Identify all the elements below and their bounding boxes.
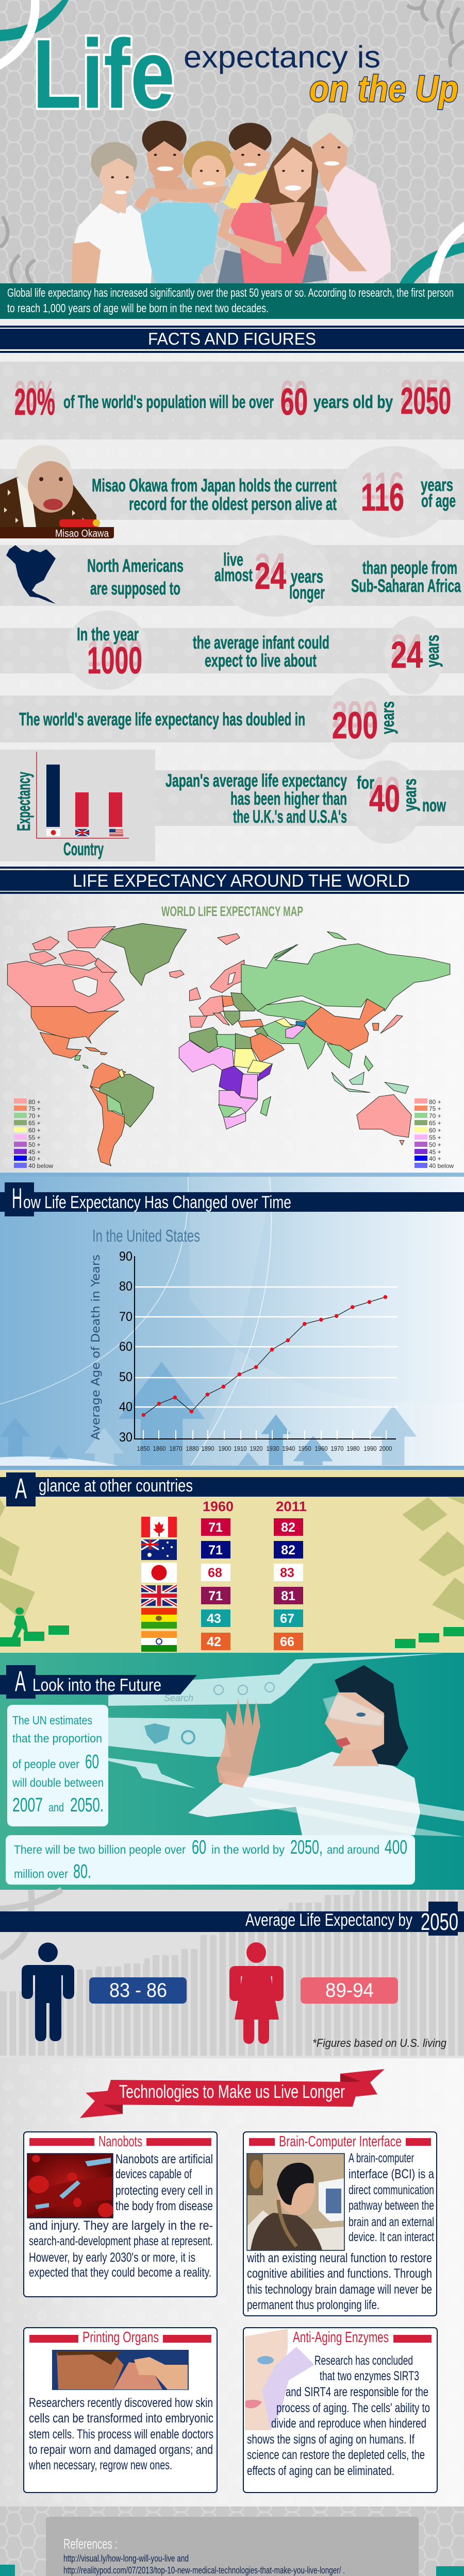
decorative ring — [0, 1890, 62, 1958]
section heading: facts and figures: FACTS AND FIGURES — [148, 329, 316, 348]
line chart: average age of death: 1910 — [234, 1445, 246, 1452]
line chart: average age of death: 50 — [119, 1370, 132, 1384]
legend right: 40 + — [429, 1155, 441, 1162]
callout: UN estimates: and — [48, 1801, 64, 1814]
card text: cells can be transformed into embryonic — [29, 2411, 213, 2426]
fact: year 1000: 1000 — [87, 640, 142, 682]
card: Brain-Computer Interface — [243, 2132, 437, 2316]
line chart: average age of death: 1940 — [283, 1445, 295, 1452]
name label: Misao Okawa — [55, 528, 109, 539]
line chart: average age of death: 60 — [119, 1340, 132, 1354]
panel: how life expectancy has changed — [0, 1170, 464, 1470]
fact: North Americans: are supposed to — [90, 579, 180, 599]
fact: 20 percent: of The world's population will be over — [63, 392, 274, 412]
legend right — [415, 1098, 454, 1170]
card: Printing Organs — [24, 2328, 217, 2493]
card text: and injury. They are largely in the re- — [29, 2218, 213, 2233]
line chart: average age of death: 1880 — [186, 1445, 199, 1452]
card text: Researchers recently discovered how skin — [29, 2396, 213, 2410]
line chart: average age of death: 1950 — [298, 1445, 311, 1452]
card text — [29, 2152, 213, 2280]
card: Anti-Aging Enzymes — [243, 2328, 437, 2493]
fact: Misao Okawa: 116 — [361, 464, 404, 507]
fact: North Americans: North Americans — [87, 556, 184, 576]
line chart: average age of death: Average Age of Death in Years — [90, 1255, 103, 1440]
image: person wearing EEG cap — [247, 2154, 344, 2250]
line chart: average age of death: 1860 — [153, 1445, 166, 1452]
interface details — [144, 1683, 274, 1744]
bar chart: expectancy by country: Country — [63, 839, 104, 859]
label: men 83-86 — [89, 1977, 187, 2004]
section heading: how life expectancy changed: H — [12, 1182, 22, 1214]
fact: doubled in 200 years: years — [378, 701, 398, 734]
table column headings: 1960 — [203, 1499, 234, 1514]
grandfather — [307, 113, 391, 284]
fact: Japan 40 years: now — [422, 795, 446, 816]
line chart: average age of death: 1990 — [364, 1445, 376, 1452]
card heading: Anti-Aging Enzymes — [293, 2329, 389, 2346]
card text: the body from disease — [115, 2199, 213, 2213]
table column headings: 2011 — [276, 1499, 307, 1514]
intro text bar: to reach 1,000 years of age will be born in the next two decades. — [7, 301, 269, 315]
callout: UN estimates: of people over — [12, 1757, 79, 1771]
callout: two billion people: There will be two billion people over — [14, 1843, 186, 1856]
fact: Japan 40 years: for — [357, 773, 374, 793]
section heading: around the world: LIFE EXPECTANCY AROUND THE WORLD — [73, 871, 410, 891]
card heading: Printing Organs — [82, 2329, 159, 2346]
line chart: average age of death: 1980 — [346, 1445, 360, 1452]
fact: Japan 40 years: 40 — [369, 770, 400, 811]
line chart: average age of death: 80 — [119, 1279, 132, 1294]
section heading: how life expectancy changed — [0, 1182, 464, 1216]
panel: technologies to make us live longer — [0, 2058, 464, 2506]
row: Canada: 82 — [281, 1520, 295, 1535]
row: Bolivia: 67 — [280, 1612, 294, 1626]
fact: year 1000: In the year — [77, 624, 139, 645]
card text: effects of aging can be eliminated. — [247, 2464, 394, 2478]
label: women 89-94 — [301, 1977, 398, 2004]
legend right: 45 + — [429, 1148, 441, 1156]
grandmother — [72, 142, 153, 284]
legend right: 80 + — [429, 1098, 441, 1106]
callout: two billion people: in the world by — [211, 1843, 285, 1856]
card: Nanobots — [24, 2132, 217, 2297]
line chart: average age of death: 1900 — [219, 1445, 231, 1452]
card heading — [29, 2133, 211, 2150]
row: Canada — [141, 1517, 303, 1537]
row: India: 66 — [280, 1635, 294, 1649]
fact: North Americans: longer — [289, 583, 325, 603]
line chart: average age of death: 40 — [119, 1400, 132, 1414]
legend right: 75 + — [429, 1105, 441, 1112]
card text: shows the signs of aging on humans. If — [247, 2432, 415, 2447]
fact: Misao Okawa — [0, 445, 456, 539]
title — [32, 20, 458, 129]
fact: Misao Okawa: Misao Okawa from Japan holds the current — [92, 476, 337, 496]
callout: UN estimates: will double between — [12, 1776, 104, 1789]
footnote: *Figures based on U.S. living — [312, 2037, 447, 2049]
line chart: average age of death: 1870 — [169, 1445, 183, 1452]
fact: Japan 40 years: has been higher than — [230, 789, 347, 809]
fact: doubled in 200 years: The world's average life expectancy has doubled in — [19, 709, 305, 730]
fact: year 1000: 1000 — [87, 633, 142, 674]
fact: Japan 40 years: 40 — [369, 778, 400, 820]
legend right: 55 + — [429, 1134, 441, 1141]
row: UK — [141, 1585, 303, 1606]
row: Japan: 83 — [280, 1566, 294, 1580]
card text: However, by early 2030's or more, it is — [29, 2250, 195, 2265]
legend left: 45 + — [28, 1148, 41, 1156]
callout: UN estimates: 60 — [85, 1751, 99, 1773]
label: men 83-86: 83 - 86 — [109, 1979, 167, 2002]
fact: North Americans: 24 — [255, 546, 286, 588]
flag: UK — [75, 829, 89, 836]
legend left: 50 + — [28, 1141, 41, 1148]
fact: year 1000: 24 — [391, 634, 423, 676]
row: Australia — [141, 1539, 303, 1560]
card text: search-and-development phase at represent. — [29, 2234, 213, 2248]
family photo — [72, 113, 391, 284]
row: India — [141, 1631, 303, 1652]
photo: Misao Okawa — [0, 445, 100, 527]
callout: two billion people: million over — [14, 1867, 68, 1880]
legend left: 40 + — [28, 1155, 41, 1162]
ribbon heading: Technologies to Make us Live Longer — [119, 2081, 345, 2102]
legend left: 40 below — [28, 1162, 53, 1170]
table column headings — [203, 1499, 307, 1514]
card text: when necessary, regrow new ones. — [28, 2458, 172, 2472]
card text: stem cells. This process will enable doctors — [29, 2427, 213, 2442]
fact: North Americans: live — [223, 550, 243, 570]
corner decoration bottom right — [0, 216, 464, 283]
panel: facts and figures — [0, 326, 464, 867]
icon: woman — [229, 1942, 284, 2044]
section heading: a glance: A — [15, 1472, 27, 1504]
interface details: Search — [164, 1693, 193, 1703]
card text: interface (BCI) is a — [349, 2167, 434, 2181]
callout: UN estimates — [7, 1705, 108, 1826]
legend left: 55 + — [28, 1134, 41, 1141]
card text: to repair worn and damaged organs; and — [29, 2443, 213, 2457]
section heading: a look into the future: A — [15, 1665, 26, 1697]
panel: a glance at other countries — [0, 1470, 464, 1653]
fact: North Americans: years — [291, 567, 323, 587]
card text: Nanobots are artificial — [115, 2152, 213, 2166]
card heading: Brain-Computer Interface — [279, 2133, 402, 2150]
legend left: 80 + — [28, 1098, 41, 1106]
legend right: 40 below — [429, 1162, 454, 1170]
legend left: 60 + — [28, 1127, 41, 1134]
fact: year 1000 — [77, 624, 443, 682]
card text: that two enzymes SIRT3 — [320, 2369, 419, 2383]
references panel — [46, 2517, 419, 2576]
callout: two billion people — [6, 1835, 415, 1885]
section heading: how life expectancy changed: ow Life Expectancy Has Changed over Time — [23, 1193, 291, 1212]
image: skin treatment — [52, 2350, 189, 2390]
panel: average life expectancy by 2050 — [0, 1890, 464, 2058]
references panel: http://realitypod.com/07/2013/top-10-new-medical-technologies-that-make-you-live-longer/ . — [63, 2565, 345, 2575]
side blocks right — [436, 2566, 464, 2576]
line chart: average age of death: 2000 — [379, 1445, 392, 1452]
decorative steps and walking figure — [0, 1607, 464, 1648]
label: women 89-94: 89-94 — [325, 1979, 374, 2002]
legend right: 60 + — [429, 1127, 441, 1134]
decorative diamonds — [0, 1497, 464, 1620]
fact: 20 percent — [14, 372, 451, 423]
card heading: Nanobots — [98, 2133, 142, 2150]
legend right: 65 + — [429, 1120, 441, 1127]
fact: year 1000: 24 — [391, 627, 423, 669]
background — [0, 353, 464, 867]
fact: 20 percent: 20% — [14, 374, 55, 415]
row: Canada: 71 — [208, 1520, 223, 1535]
fact: Japan 40 years: Japan's average life expectancy — [165, 771, 347, 791]
references panel: References : — [63, 2536, 118, 2552]
panel: life expectancy around the world — [0, 867, 464, 1173]
fact: doubled in 200 years: 200 — [332, 694, 378, 736]
fact: Misao Okawa: 116 — [361, 476, 404, 519]
fact: North Americans — [6, 545, 461, 604]
row: UK: 71 — [208, 1589, 223, 1603]
legend left: 70 + — [28, 1112, 41, 1120]
legend right: 70 + — [429, 1112, 441, 1120]
section heading: by 2050: Average Life Expectancy by — [245, 1910, 412, 1930]
flag: USA — [109, 829, 123, 836]
card text — [247, 2353, 430, 2478]
fact: Japan 40 years: the U.K.'s and U.S.A's — [233, 807, 347, 827]
fact: 20 percent: years old by — [313, 392, 393, 412]
fact: 20 percent: 60 — [280, 381, 308, 423]
card text — [28, 2396, 213, 2472]
line chart: average age of death: 1970 — [331, 1445, 343, 1452]
callout: two billion people: and around — [327, 1843, 379, 1856]
icon: North America map — [6, 545, 56, 604]
fact: North Americans: 24 — [255, 555, 286, 597]
callout: two billion people: 400 — [385, 1837, 407, 1858]
panel: header background — [0, 0, 464, 326]
map title: WORLD LIFE EXPECTANCY MAP — [161, 904, 303, 919]
fact: North Americans: almost — [214, 565, 253, 585]
line chart: average age of death: 1930 — [266, 1445, 279, 1452]
callout: two billion people: 60 — [192, 1837, 206, 1858]
row: Bolivia: 43 — [207, 1612, 221, 1626]
title: Life — [32, 20, 175, 129]
row: UK: 81 — [281, 1589, 295, 1603]
line chart: average age of death: 1890 — [201, 1445, 214, 1452]
row: Japan: 68 — [208, 1566, 222, 1580]
row: India: 42 — [207, 1635, 221, 1649]
icon: man — [22, 1942, 74, 2041]
row: Australia: 82 — [281, 1543, 295, 1557]
card text — [246, 2151, 434, 2312]
fact: Japan 40 years — [165, 770, 446, 827]
callout: two billion people: 80. — [73, 1861, 91, 1883]
line chart: average age of death: 30 — [119, 1430, 132, 1445]
line chart: average age of death — [90, 1249, 397, 1452]
section heading: a glance — [0, 1472, 464, 1506]
bar chart: expectancy by country: Expectancy — [14, 772, 34, 831]
section heading: a look into the future — [0, 1665, 197, 1699]
background arrows and arcs — [0, 1170, 464, 1466]
callout: two billion people: 2050, — [290, 1837, 323, 1858]
card text: permanent thus prolonging life. — [247, 2298, 379, 2312]
title: expectancy is — [184, 40, 380, 74]
chart subtitle: In the United States — [92, 1226, 200, 1245]
card text: protecting every cell in — [115, 2183, 213, 2198]
fact: 20 percent: 20% — [14, 381, 55, 423]
line chart: average age of death: 70 — [119, 1310, 132, 1324]
panel: footer — [0, 2506, 464, 2576]
strip below intro — [0, 319, 464, 326]
girl — [135, 141, 234, 210]
card text: expected that they could become a reality. — [29, 2265, 211, 2280]
line chart: average age of death: 1960 — [314, 1445, 328, 1452]
boy — [218, 123, 327, 284]
side blocks left — [0, 2565, 15, 2576]
name label — [0, 527, 114, 539]
callout: UN estimates: 2007 — [12, 1794, 43, 1816]
card text: A brain-computer — [349, 2151, 414, 2165]
callout: UN estimates: The UN estimates — [12, 1714, 92, 1727]
callout: UN estimates: 2050. — [70, 1794, 104, 1816]
world map — [7, 923, 450, 1166]
corner decoration top left — [0, 0, 464, 70]
fact: year 1000: expect to live about — [205, 651, 317, 671]
glass interface panels — [108, 1653, 444, 1788]
references panel: http://visual.ly/how-long-will-you-live and — [63, 2553, 189, 2564]
panel: a look into the future — [0, 1653, 464, 1890]
image: nanobots in blood — [27, 2154, 113, 2218]
legend left — [14, 1098, 53, 1170]
fact: doubled in 200 years: 200 — [332, 705, 378, 747]
fact: 20 percent: 60 — [280, 374, 308, 415]
section heading: facts and figures — [0, 326, 464, 353]
fact: year 1000: the average infant could — [193, 633, 329, 653]
intro text bar — [0, 283, 464, 319]
card text: devices capable of — [115, 2167, 192, 2181]
stair-step stripes — [0, 1890, 464, 2058]
card text: Research has concluded — [314, 2353, 413, 2368]
fact: year 1000: years — [423, 635, 443, 667]
fact: Japan 40 years: years — [400, 778, 420, 811]
fact: Misao Okawa: record for the oldest person alive at — [129, 494, 337, 514]
legend right: 50 + — [429, 1141, 441, 1148]
legend left: 65 + — [28, 1120, 41, 1127]
row: Australia: 71 — [208, 1543, 223, 1557]
card heading — [29, 2329, 211, 2346]
photo: woman with goggles — [188, 1665, 464, 1837]
bar chart: expectancy by country — [0, 750, 155, 861]
image: woman's face and petal — [245, 2329, 314, 2430]
father — [141, 121, 219, 284]
line chart: average age of death: 1920 — [250, 1445, 263, 1452]
section heading: around the world — [0, 867, 464, 894]
line chart: average age of death: 1850 — [137, 1445, 150, 1452]
line chart: average age of death: 90 — [119, 1249, 132, 1264]
callout: UN estimates: that the proportion — [12, 1732, 102, 1745]
row: Japan — [141, 1563, 303, 1583]
row: Bolivia — [141, 1608, 303, 1629]
flag: Japan — [46, 829, 60, 836]
ribbon heading — [80, 2069, 385, 2118]
mother — [218, 137, 367, 284]
section heading: by 2050 — [0, 1902, 464, 1936]
fact: doubled in 200 years — [19, 694, 398, 747]
section heading: a glance: glance at other countries — [39, 1476, 193, 1496]
section heading: a look into the future: Look into the Future — [32, 1675, 161, 1695]
legend left: 75 + — [28, 1105, 41, 1112]
